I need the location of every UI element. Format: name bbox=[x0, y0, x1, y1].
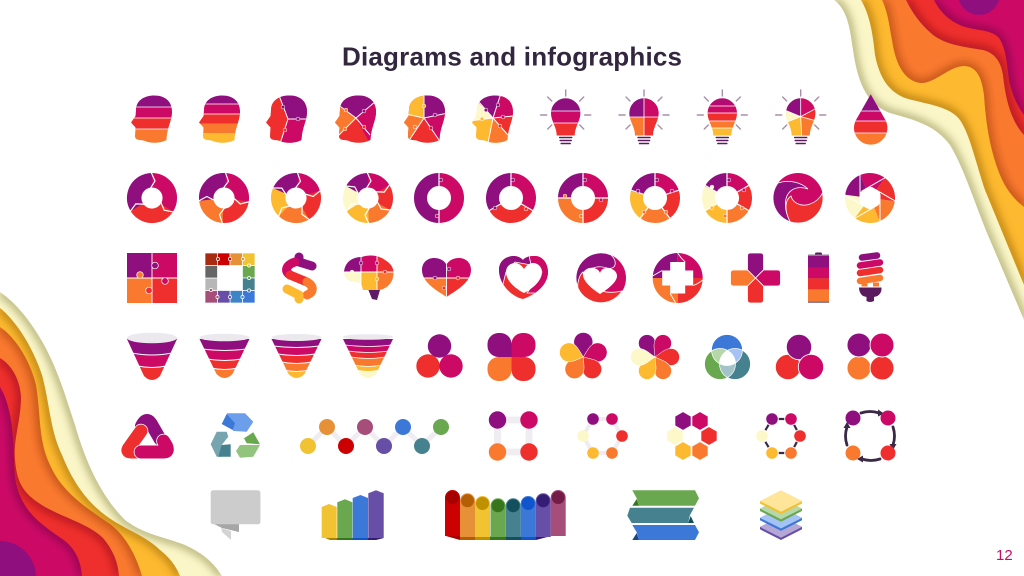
icon: recycle arrows bbox=[211, 413, 260, 458]
icon: head 4 puzzle pieces bbox=[335, 96, 376, 143]
page number: 12 bbox=[996, 547, 1013, 564]
icon: zigzag dot chain bbox=[300, 419, 449, 454]
icon: head 4 bands bbox=[131, 96, 172, 143]
icon: jigsaw colour ring bbox=[205, 253, 255, 303]
icon: grey ribbon speech banner bbox=[211, 490, 260, 540]
icon: colour venn diagram bbox=[704, 334, 750, 380]
icon: hexagon ring bbox=[667, 412, 717, 460]
background: bottom left paper-cut corner bbox=[0, 292, 222, 576]
icon: donut 6 puzzle bbox=[702, 172, 752, 224]
icon: donut 3 arrows bbox=[127, 172, 177, 223]
icon: spiral bulb bbox=[859, 256, 882, 302]
icon: head 3 puzzle pieces bbox=[266, 96, 307, 143]
icon: bulb 4 quarters bbox=[619, 90, 669, 144]
icon: dollar sign bbox=[287, 257, 312, 299]
icon: head 5 puzzle pieces bbox=[404, 96, 445, 143]
icon: donut 2 puzzle bbox=[420, 172, 458, 224]
icon: battery bbox=[808, 252, 829, 303]
icon: six petal flower bbox=[630, 332, 680, 382]
icon: three overlapping circles bbox=[775, 334, 824, 380]
icon: four node square bbox=[489, 411, 538, 461]
icon: four interlocked circles bbox=[847, 333, 894, 380]
icon: stacked banner arrows bbox=[627, 490, 699, 540]
icon: water drop bbox=[854, 94, 888, 145]
icon: funnel 6 levels bbox=[342, 334, 394, 381]
icon: funnel 5 levels bbox=[270, 334, 322, 381]
icon: donut 5 arrows bbox=[271, 172, 322, 223]
icon: bulb 6 sectors bbox=[776, 90, 826, 144]
icon: four petal clover bbox=[488, 333, 536, 381]
icon: funnel 4 levels bbox=[198, 334, 250, 381]
icon: four node arrow cycle bbox=[844, 410, 896, 462]
icon: head 6 puzzle pieces bbox=[472, 96, 513, 143]
icon: donut 6 arrows bbox=[344, 172, 392, 224]
icon: 4-piece jigsaw square bbox=[127, 253, 177, 303]
icon: medical cross in circle bbox=[652, 252, 704, 304]
title: Diagrams and infographics bbox=[342, 42, 682, 72]
icon: bulb 3 bands bbox=[541, 90, 591, 144]
icon: six node ring light bbox=[577, 413, 628, 459]
icon: puzzle brain bbox=[344, 256, 394, 300]
icon: rising arrow bars bbox=[322, 490, 384, 540]
icon: bulb 5 bands bbox=[697, 90, 747, 144]
icon: four-part plus bbox=[730, 253, 780, 303]
icon: donut 4 puzzle bbox=[557, 172, 609, 224]
icon: head 5 bands bbox=[199, 96, 240, 143]
icon: donut 3 puzzle bbox=[486, 172, 536, 223]
icon: three circles bbox=[416, 334, 463, 378]
background: top right paper-cut corner bbox=[834, 0, 1024, 320]
icon: five petal flower bbox=[557, 332, 610, 382]
icon: heart in circle bbox=[576, 253, 626, 303]
icon: rounded triangle cycle bbox=[128, 420, 167, 452]
icon: funnel 3 levels bbox=[126, 333, 178, 383]
icon: swirl circle bbox=[773, 173, 823, 223]
icon: donut 5 puzzle bbox=[629, 172, 681, 224]
icon: heart ring bbox=[499, 256, 548, 299]
icon: layered stack bbox=[760, 490, 802, 540]
icon: camera shutter bbox=[844, 174, 896, 222]
icon: rounded colour tabs bbox=[445, 490, 566, 540]
icon: donut 4 arrows bbox=[198, 172, 250, 224]
icon: puzzle heart bbox=[422, 258, 471, 297]
icon: six node ring dark bbox=[755, 412, 807, 460]
